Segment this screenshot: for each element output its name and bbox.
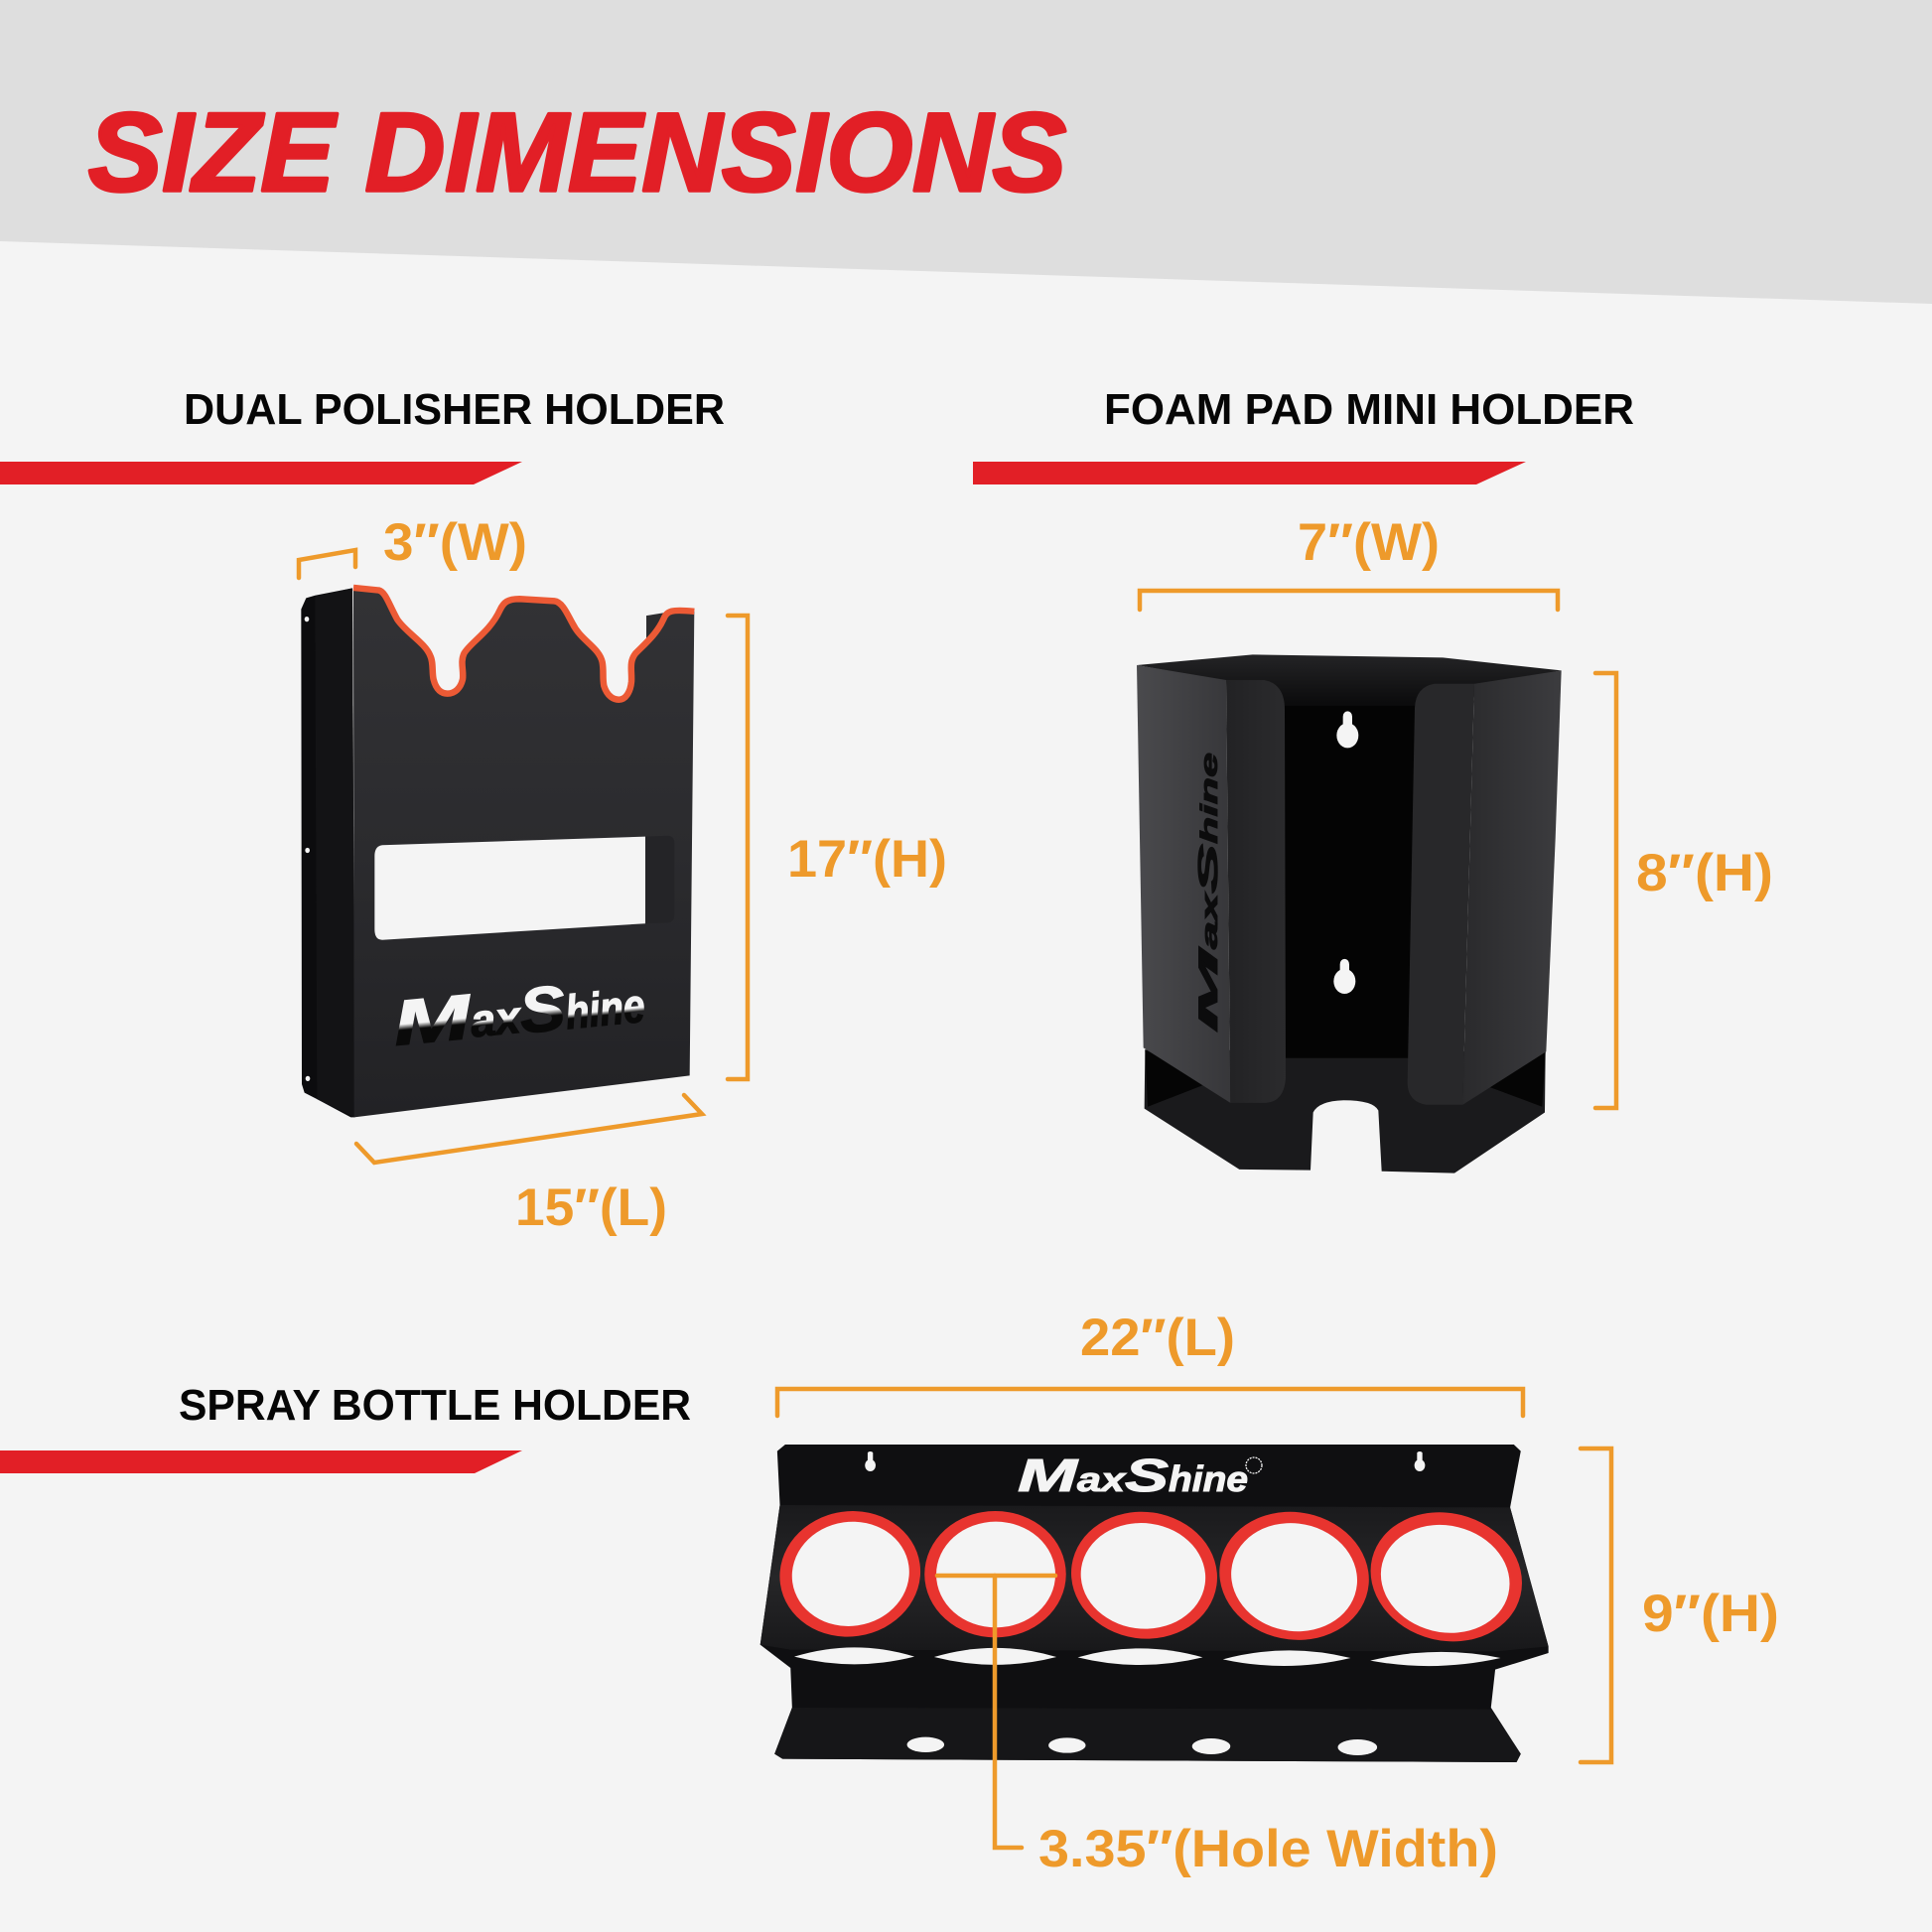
logo: S <box>1125 1449 1169 1501</box>
logo <box>1018 1449 1262 1501</box>
logo cutout <box>1192 753 1223 1033</box>
bottom plate holes <box>907 1737 1377 1755</box>
dimension: 8 in height: 8″(H) <box>1636 844 1773 902</box>
logo: M <box>1018 1449 1080 1501</box>
logo cutout: M <box>389 981 476 1059</box>
header band <box>0 0 1932 304</box>
logo cutout: S <box>1192 843 1223 894</box>
side flange <box>301 588 354 1117</box>
logo cutout <box>389 964 647 1059</box>
logo: ax <box>1077 1461 1128 1499</box>
logo: hine <box>1169 1458 1248 1499</box>
keyholes <box>865 1451 1425 1471</box>
logo cutout: ax <box>469 991 525 1046</box>
side wall <box>315 588 354 1117</box>
dimension: 15 in length: 15″(L) <box>515 1178 667 1237</box>
window inner wall <box>645 836 674 923</box>
dimension: 22 in length <box>777 1309 1523 1416</box>
ring openings <box>788 1520 1521 1638</box>
keyhole upper <box>1336 711 1358 748</box>
body silhouette <box>760 1445 1549 1762</box>
dimension: 9 in height <box>1581 1449 1779 1762</box>
logo cutout: hine <box>1196 753 1223 844</box>
rear tab <box>646 612 670 640</box>
heading: foam pad mini holder <box>973 385 1634 484</box>
window opening <box>374 837 645 940</box>
logo cutout: S <box>516 972 569 1047</box>
dimension: 8 in height <box>1595 673 1773 1108</box>
dimension: 7 in width <box>1140 513 1558 610</box>
right side panel <box>1462 670 1562 1105</box>
lower openings <box>794 1647 1500 1666</box>
dimension: 3.35 in hole width: 3.35″(Hole Width) <box>1038 1820 1498 1878</box>
heading: foam pad mini holder: FOAM PAD MINI HOLDER <box>1104 385 1634 434</box>
heading: spray bottle holder: SPRAY BOTTLE HOLDER <box>179 1381 691 1430</box>
dimension: 17 in height: 17″(H) <box>787 830 947 889</box>
left side panel <box>1137 665 1230 1103</box>
right front fold <box>1408 684 1474 1105</box>
dimension: 22 in length: 22″(L) <box>1080 1309 1235 1367</box>
dimension: 15 in length <box>356 1095 702 1237</box>
product: dual polisher holder <box>301 588 694 1117</box>
keyhole lower <box>1333 959 1355 994</box>
mounting holes <box>305 617 310 1081</box>
back panel <box>1278 706 1420 1058</box>
left front fold <box>1226 680 1286 1103</box>
product: spray bottle holder <box>760 1445 1549 1762</box>
dimension: 3.35 in hole width <box>937 1576 1498 1878</box>
middle panel <box>760 1505 1549 1651</box>
dimension: 17 in height <box>728 616 947 1079</box>
logo cutout: M <box>1193 947 1223 1033</box>
heading: spray bottle holder <box>0 1381 691 1473</box>
back interior <box>1137 654 1562 1057</box>
lower bottom plate <box>774 1708 1521 1762</box>
front panel <box>353 588 694 1117</box>
base side slots <box>1145 1049 1211 1107</box>
dimension: 3 in width: 3″(W) <box>383 513 527 572</box>
rubber edge trim <box>353 588 694 700</box>
red rings <box>774 1506 1535 1648</box>
dimension: 7 in width: 7″(W) <box>1298 513 1440 572</box>
base plate <box>1145 1049 1546 1173</box>
logo cutout: hine <box>563 980 647 1039</box>
heading: dual polisher holder <box>0 385 725 484</box>
heading: dual polisher holder: DUAL POLISHER HOLDER <box>184 385 725 434</box>
product: foam pad mini holder <box>1137 654 1562 1173</box>
dimension: 9 in height: 9″(H) <box>1642 1585 1779 1643</box>
logo cutout: ax <box>1197 892 1222 949</box>
title: SIZE DIMENSIONS <box>88 90 1066 214</box>
dimension: 3 in width <box>299 513 527 578</box>
